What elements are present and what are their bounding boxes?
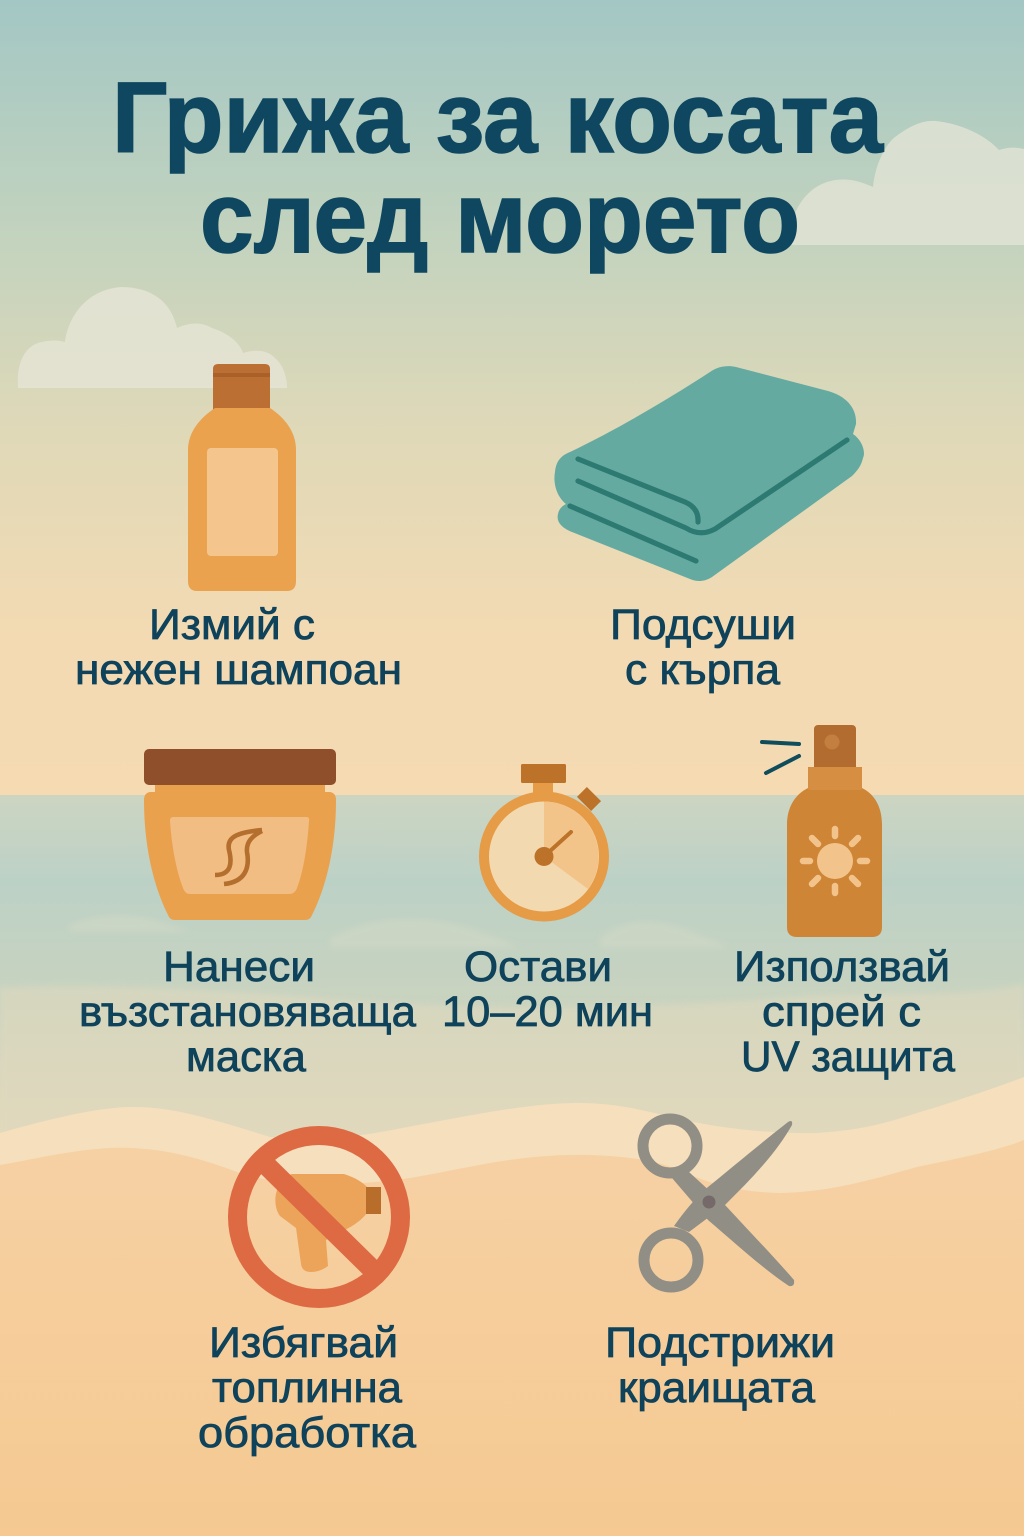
icon: spray lines	[762, 742, 799, 773]
icon: scissors	[643, 1119, 794, 1287]
label: apply mask: възстановяваща	[79, 988, 416, 1036]
icon: folded towel	[554, 366, 864, 581]
label: avoid heat: обработка	[198, 1409, 416, 1457]
icon: mask jar	[144, 749, 336, 920]
step 6: avoid heat	[198, 1136, 416, 1457]
title: след морето	[200, 162, 800, 274]
label: dry	[610, 601, 796, 694]
icon: crossed-out hair dryer	[238, 1136, 400, 1298]
icon: spray bottle	[762, 725, 882, 937]
label: use UV spray: Използвай	[734, 943, 950, 991]
label: leave on: 10–20 мин	[442, 988, 653, 1036]
label: use UV spray: спрей с	[762, 988, 921, 1036]
icon: sun	[803, 829, 867, 893]
label: avoid heat	[198, 1319, 416, 1457]
label: apply mask	[79, 943, 416, 1081]
label: use UV spray	[734, 943, 955, 1081]
title: Грижа за косата	[112, 62, 884, 174]
step 3: mask	[79, 749, 416, 1081]
step 7: trim	[605, 1119, 835, 1412]
label: leave on	[442, 943, 653, 1036]
background: sky	[0, 0, 1024, 796]
step 2: towel	[554, 366, 864, 694]
cloud: top right	[790, 121, 1024, 245]
icon: hair strands	[215, 830, 262, 884]
label: apply mask: Нанеси	[163, 943, 315, 991]
label: dry: с кърпа	[625, 646, 780, 694]
icon: stopwatch	[484, 764, 604, 916]
label: wash: нежен шампоан	[75, 646, 402, 694]
label: use UV spray: UV защита	[741, 1033, 955, 1081]
label: trim ends: краищата	[618, 1364, 815, 1412]
background: light sand wave	[0, 1077, 1024, 1300]
cloud: left	[18, 287, 287, 388]
step 1: shampoo	[75, 364, 402, 694]
background: sea	[0, 795, 1024, 1140]
label: wash: Измий с	[149, 601, 315, 649]
label: avoid heat: Избягвай	[209, 1319, 398, 1367]
label: trim ends: Подстрижи	[605, 1319, 835, 1367]
label: leave on: Остави	[464, 943, 612, 991]
background: sand	[0, 1140, 1024, 1536]
label: dry: Подсуши	[610, 601, 796, 649]
label: apply mask: маска	[186, 1033, 306, 1081]
label: wash	[75, 601, 402, 694]
label: trim ends	[605, 1319, 835, 1412]
label: avoid heat: топлинна	[212, 1364, 402, 1412]
step 5: UV spray	[734, 725, 955, 1081]
step 4: wait	[442, 764, 653, 1036]
title	[112, 62, 884, 274]
icon: shampoo bottle	[188, 364, 296, 591]
